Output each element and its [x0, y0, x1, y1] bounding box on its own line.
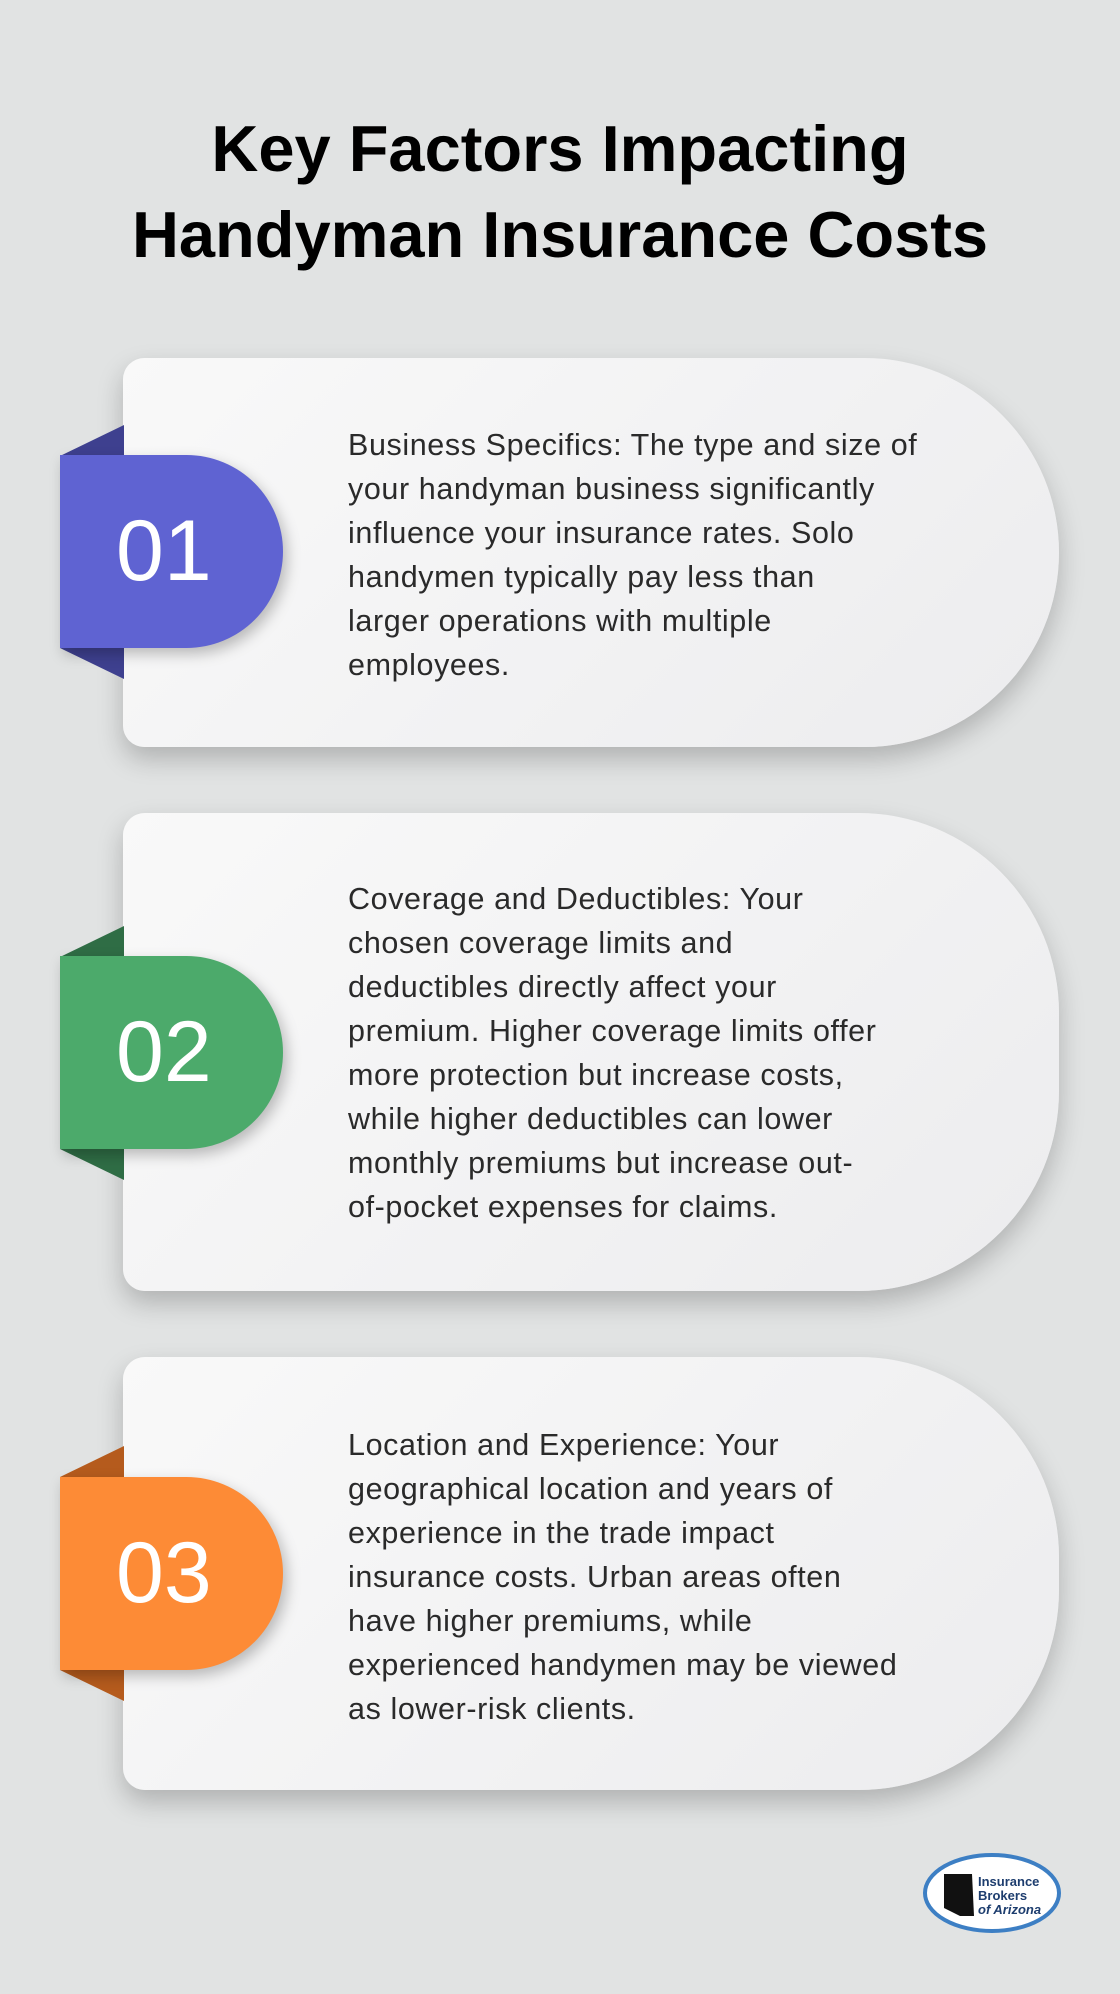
text 3: insurance costs. Urban areas often [348, 1560, 841, 1594]
text 2: deductibles directly affect your [348, 970, 777, 1004]
panel: coverage and deductibles [123, 813, 1059, 1291]
panel: location and experience [123, 1357, 1059, 1790]
text 3: have higher premiums, while [348, 1604, 752, 1638]
text 2: while higher deductibles can lower [348, 1102, 833, 1136]
fold top 3 [60, 1446, 124, 1477]
text 1: larger operations with multiple [348, 604, 772, 638]
badge 01: 01 [116, 503, 212, 599]
title [132, 112, 988, 271]
text 2 [348, 882, 876, 1224]
text 2: of-pocket expenses for claims. [348, 1190, 778, 1224]
text 3: as lower-risk clients. [348, 1692, 636, 1726]
text 2: Coverage and Deductibles: Your [348, 882, 803, 916]
text 3: experienced handymen may be viewed [348, 1648, 897, 1682]
panel: business specifics [123, 358, 1059, 747]
text 1: employees. [348, 648, 510, 682]
badge 01 [60, 455, 283, 648]
text 1: your handyman business significantly [348, 472, 875, 506]
badge 02 [60, 956, 283, 1149]
text 3: experience in the trade impact [348, 1516, 775, 1550]
fold bottom 3 [60, 1670, 124, 1701]
text 3: Location and Experience: Your [348, 1428, 779, 1462]
text 1 [348, 428, 917, 682]
title: Handyman Insurance Costs [132, 198, 988, 271]
fold bottom 2 [60, 1149, 124, 1180]
logo: of Arizona [978, 1902, 1041, 1917]
text 1: handymen typically pay less than [348, 560, 815, 594]
text 2: more protection but increase costs, [348, 1058, 844, 1092]
title: Key Factors Impacting [211, 112, 909, 185]
badge 03: 03 [116, 1525, 212, 1621]
text 2: premium. Higher coverage limits offer [348, 1014, 876, 1048]
text 1: Business Specifics: The type and size of [348, 428, 917, 462]
logo: Brokers [978, 1888, 1027, 1903]
badge 02: 02 [116, 1004, 212, 1100]
fold top 2 [62, 926, 124, 956]
logo [923, 1853, 1061, 1933]
fold bottom 1 [60, 648, 124, 679]
text 2: chosen coverage limits and [348, 926, 733, 960]
text 3: geographical location and years of [348, 1472, 833, 1506]
logo: Insurance [978, 1874, 1039, 1889]
text 3 [348, 1428, 897, 1726]
text 2: monthly premiums but increase out- [348, 1146, 853, 1180]
fold top 1 [62, 425, 124, 455]
text 1: influence your insurance rates. Solo [348, 516, 854, 550]
badge 03 [60, 1477, 283, 1670]
